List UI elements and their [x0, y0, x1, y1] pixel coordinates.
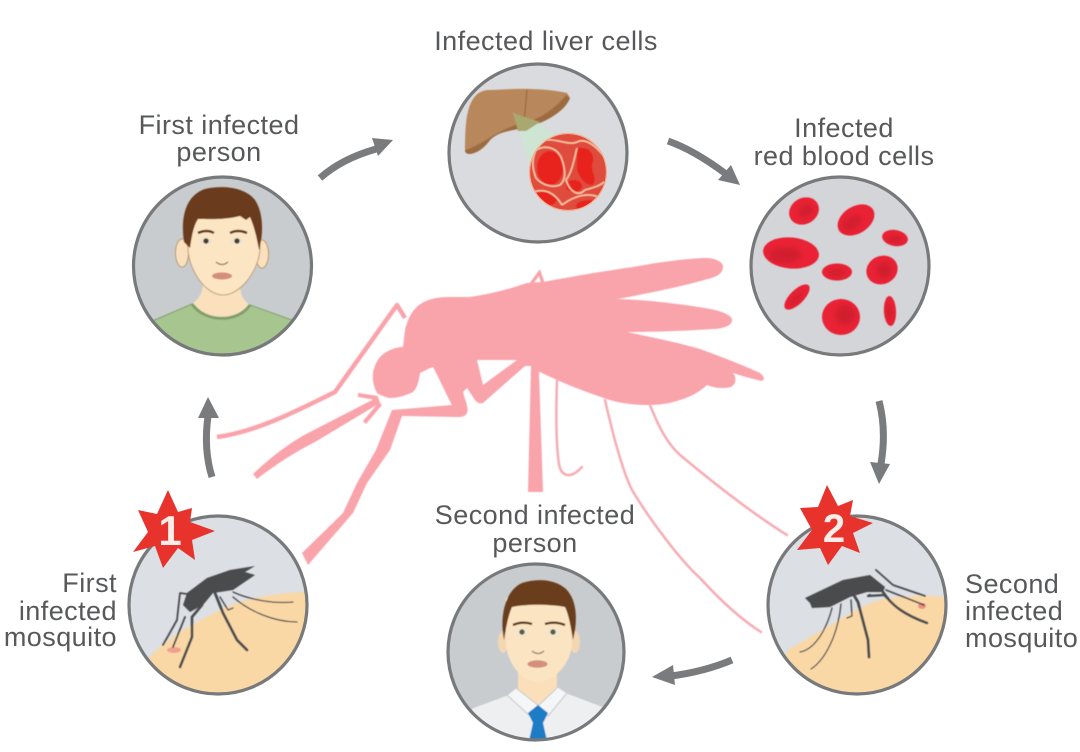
label: second infected mosquito: infected: [965, 596, 1063, 626]
face: [506, 598, 572, 682]
skin: [149, 592, 306, 692]
panel: infected red blood cells: [751, 177, 929, 355]
label: infected red blood cells: Infected: [794, 113, 894, 143]
mouth: [212, 272, 232, 280]
panel: infected liver cells: [449, 64, 627, 242]
eyes and brows: [198, 231, 247, 233]
collar: [507, 687, 567, 716]
nose: [216, 262, 228, 264]
label: second infected mosquito: mosquito: [965, 623, 1078, 653]
ears: [498, 631, 508, 653]
mouth: [528, 660, 548, 668]
arrow: liver to blood cells: [668, 141, 740, 185]
long thin leg to lower right: [605, 400, 761, 632]
central pink mosquito silhouette: [217, 258, 787, 632]
label: infected red blood cells: red blood cells: [754, 141, 934, 171]
label: first infected person: First infected: [139, 110, 299, 140]
hair: [183, 187, 262, 250]
face: [188, 212, 260, 295]
label: first infected mosquito: First: [62, 568, 117, 598]
thin hind leg hook: [556, 380, 582, 475]
label: first infected mosquito: infected: [19, 596, 117, 626]
arrow: first person to liver: [320, 138, 393, 178]
arrow: blood cells to second mosquito: [870, 401, 890, 484]
label: infected liver cells: Infected liver cells: [434, 26, 658, 56]
icon: blood cells: [762, 192, 909, 335]
icon: red burst number 2: [797, 485, 873, 565]
skin: [786, 594, 944, 692]
panel: second infected person: [448, 564, 624, 750]
nose: [532, 651, 544, 654]
tie: [528, 704, 548, 738]
shirt: [472, 694, 602, 738]
arrow: first mosquito to first person: [198, 397, 219, 477]
icon: liver: [465, 89, 570, 154]
icon: dark mosquito: [183, 566, 255, 612]
arrow: second mosquito to second person: [652, 660, 732, 685]
icon: red burst number 1: [133, 490, 215, 568]
neck: [192, 285, 250, 318]
magnifier beam: [513, 113, 553, 165]
hair: [502, 580, 576, 640]
panel: second infected mosquito: [768, 485, 950, 700]
label: first infected person: person: [176, 137, 262, 167]
panel: first infected mosquito: [129, 490, 310, 700]
panel: first infected person: [134, 177, 312, 370]
long thin leg to second mosquito: [650, 405, 787, 535]
icon: magnified liver tissue: [529, 133, 607, 212]
shirt: [154, 303, 292, 354]
neck: [517, 672, 558, 705]
ears: [176, 239, 188, 267]
icon: dark mosquito: [805, 575, 885, 608]
label: second infected person: person: [492, 528, 578, 558]
icon: red burst number 1: 1: [158, 507, 182, 554]
label: first infected mosquito: mosquito: [4, 622, 117, 652]
label: second infected mosquito: Second: [965, 569, 1059, 599]
label: second infected person: Second infected: [435, 500, 635, 530]
eyes and brows: [513, 623, 565, 625]
blood cell centres: [769, 202, 902, 325]
icon: red burst number 2: 2: [823, 507, 845, 551]
